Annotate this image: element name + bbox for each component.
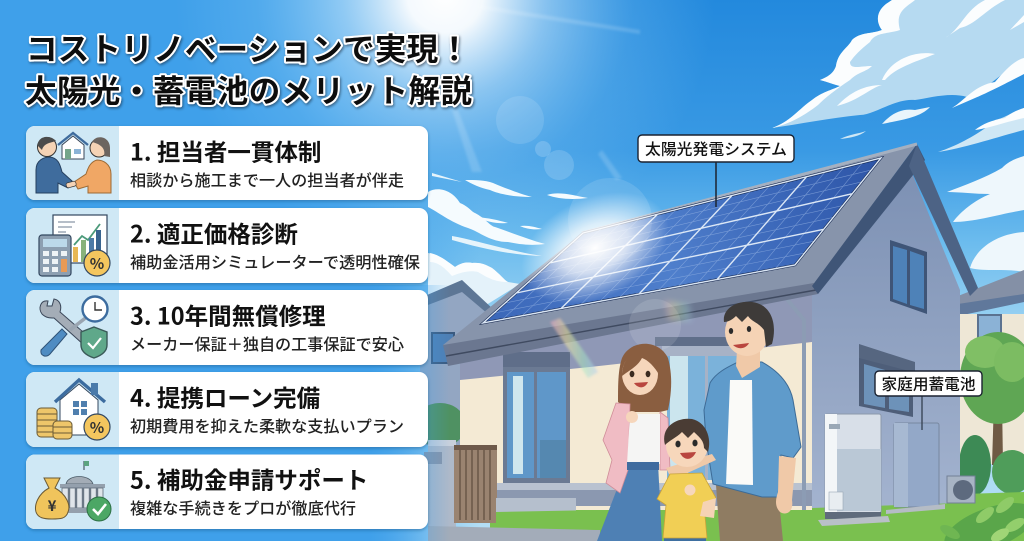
card 1: dedicated contact xyxy=(26,126,428,200)
label: solar power system: 太陽光発電システム xyxy=(645,138,787,160)
house: left window xyxy=(503,352,570,483)
card heading: 1. 担当者一貫体制 xyxy=(130,134,321,168)
battery unit: blue grey xyxy=(886,423,945,514)
card description: メーカー保証＋独自の工事保証で安心 xyxy=(130,331,404,355)
icon: calculator and chart: % xyxy=(90,253,104,274)
woman xyxy=(597,344,671,541)
label: solar power system xyxy=(638,135,794,207)
card description: 初期費用を抑えた柔軟な支払いプラン xyxy=(130,413,404,437)
clouds: right side xyxy=(947,156,1024,272)
card heading: 3. 10年間無償修理 xyxy=(130,298,326,332)
foliage, bottom right xyxy=(938,493,1024,541)
title xyxy=(25,24,472,112)
sun glare on the panels xyxy=(503,170,692,378)
card 2: fair price diagnosis xyxy=(26,208,428,283)
card 4: partner loan xyxy=(26,372,428,447)
battery unit: white xyxy=(818,414,890,526)
icon: house, coins and percent: % xyxy=(90,417,104,438)
label: home battery: 家庭用蓄電池 xyxy=(882,372,976,394)
icon: calculator and chart xyxy=(39,215,110,276)
neighbouring house and tree, right xyxy=(958,270,1024,495)
card description: 補助金活用シミュレーターで透明性確保 xyxy=(130,249,420,273)
house: downpipe xyxy=(786,298,804,510)
house: upper gable window xyxy=(890,240,927,314)
card 5: subsidy application support xyxy=(26,454,428,529)
label: home battery xyxy=(875,371,982,430)
neighbouring house, left xyxy=(414,280,494,447)
house: front wall xyxy=(460,285,812,510)
card 3: ten-year free repair xyxy=(26,290,428,365)
air conditioner outdoor unit xyxy=(947,476,975,503)
card heading: 4. 提携ローン完備 xyxy=(130,380,320,414)
card heading: 5. 補助金申請サポート xyxy=(130,462,368,496)
house: middle window xyxy=(655,337,737,480)
house: gable side wall xyxy=(812,166,960,508)
card description: 相談から施工まで一人の担当者が伴走 xyxy=(130,167,404,191)
title: コストリノベーションで実現！ xyxy=(26,24,470,70)
solid blue fade behind the cards xyxy=(0,285,450,541)
title: 太陽光・蓄電池のメリット解説 xyxy=(25,66,472,112)
card heading: 2. 適正価格診断 xyxy=(130,216,298,250)
house: lower side window xyxy=(859,344,915,417)
house: roof xyxy=(443,144,978,366)
ground: grass xyxy=(490,492,1024,541)
boy xyxy=(657,419,716,541)
clouds: upper right xyxy=(772,0,1024,152)
clouds: left of the house xyxy=(428,173,588,315)
man xyxy=(704,302,801,541)
card description: 複雑な手続きをプロが徹底代行 xyxy=(130,495,356,519)
icon: money bag, building and check xyxy=(36,461,111,521)
icon: handshake and house xyxy=(36,133,111,193)
icon: house, coins and percent xyxy=(37,380,110,440)
solar panels xyxy=(483,158,881,323)
icon: tools, clock and shield xyxy=(40,296,108,358)
icon: money bag, building and check: ¥ xyxy=(48,495,57,516)
entrance wall and gate xyxy=(424,440,600,541)
